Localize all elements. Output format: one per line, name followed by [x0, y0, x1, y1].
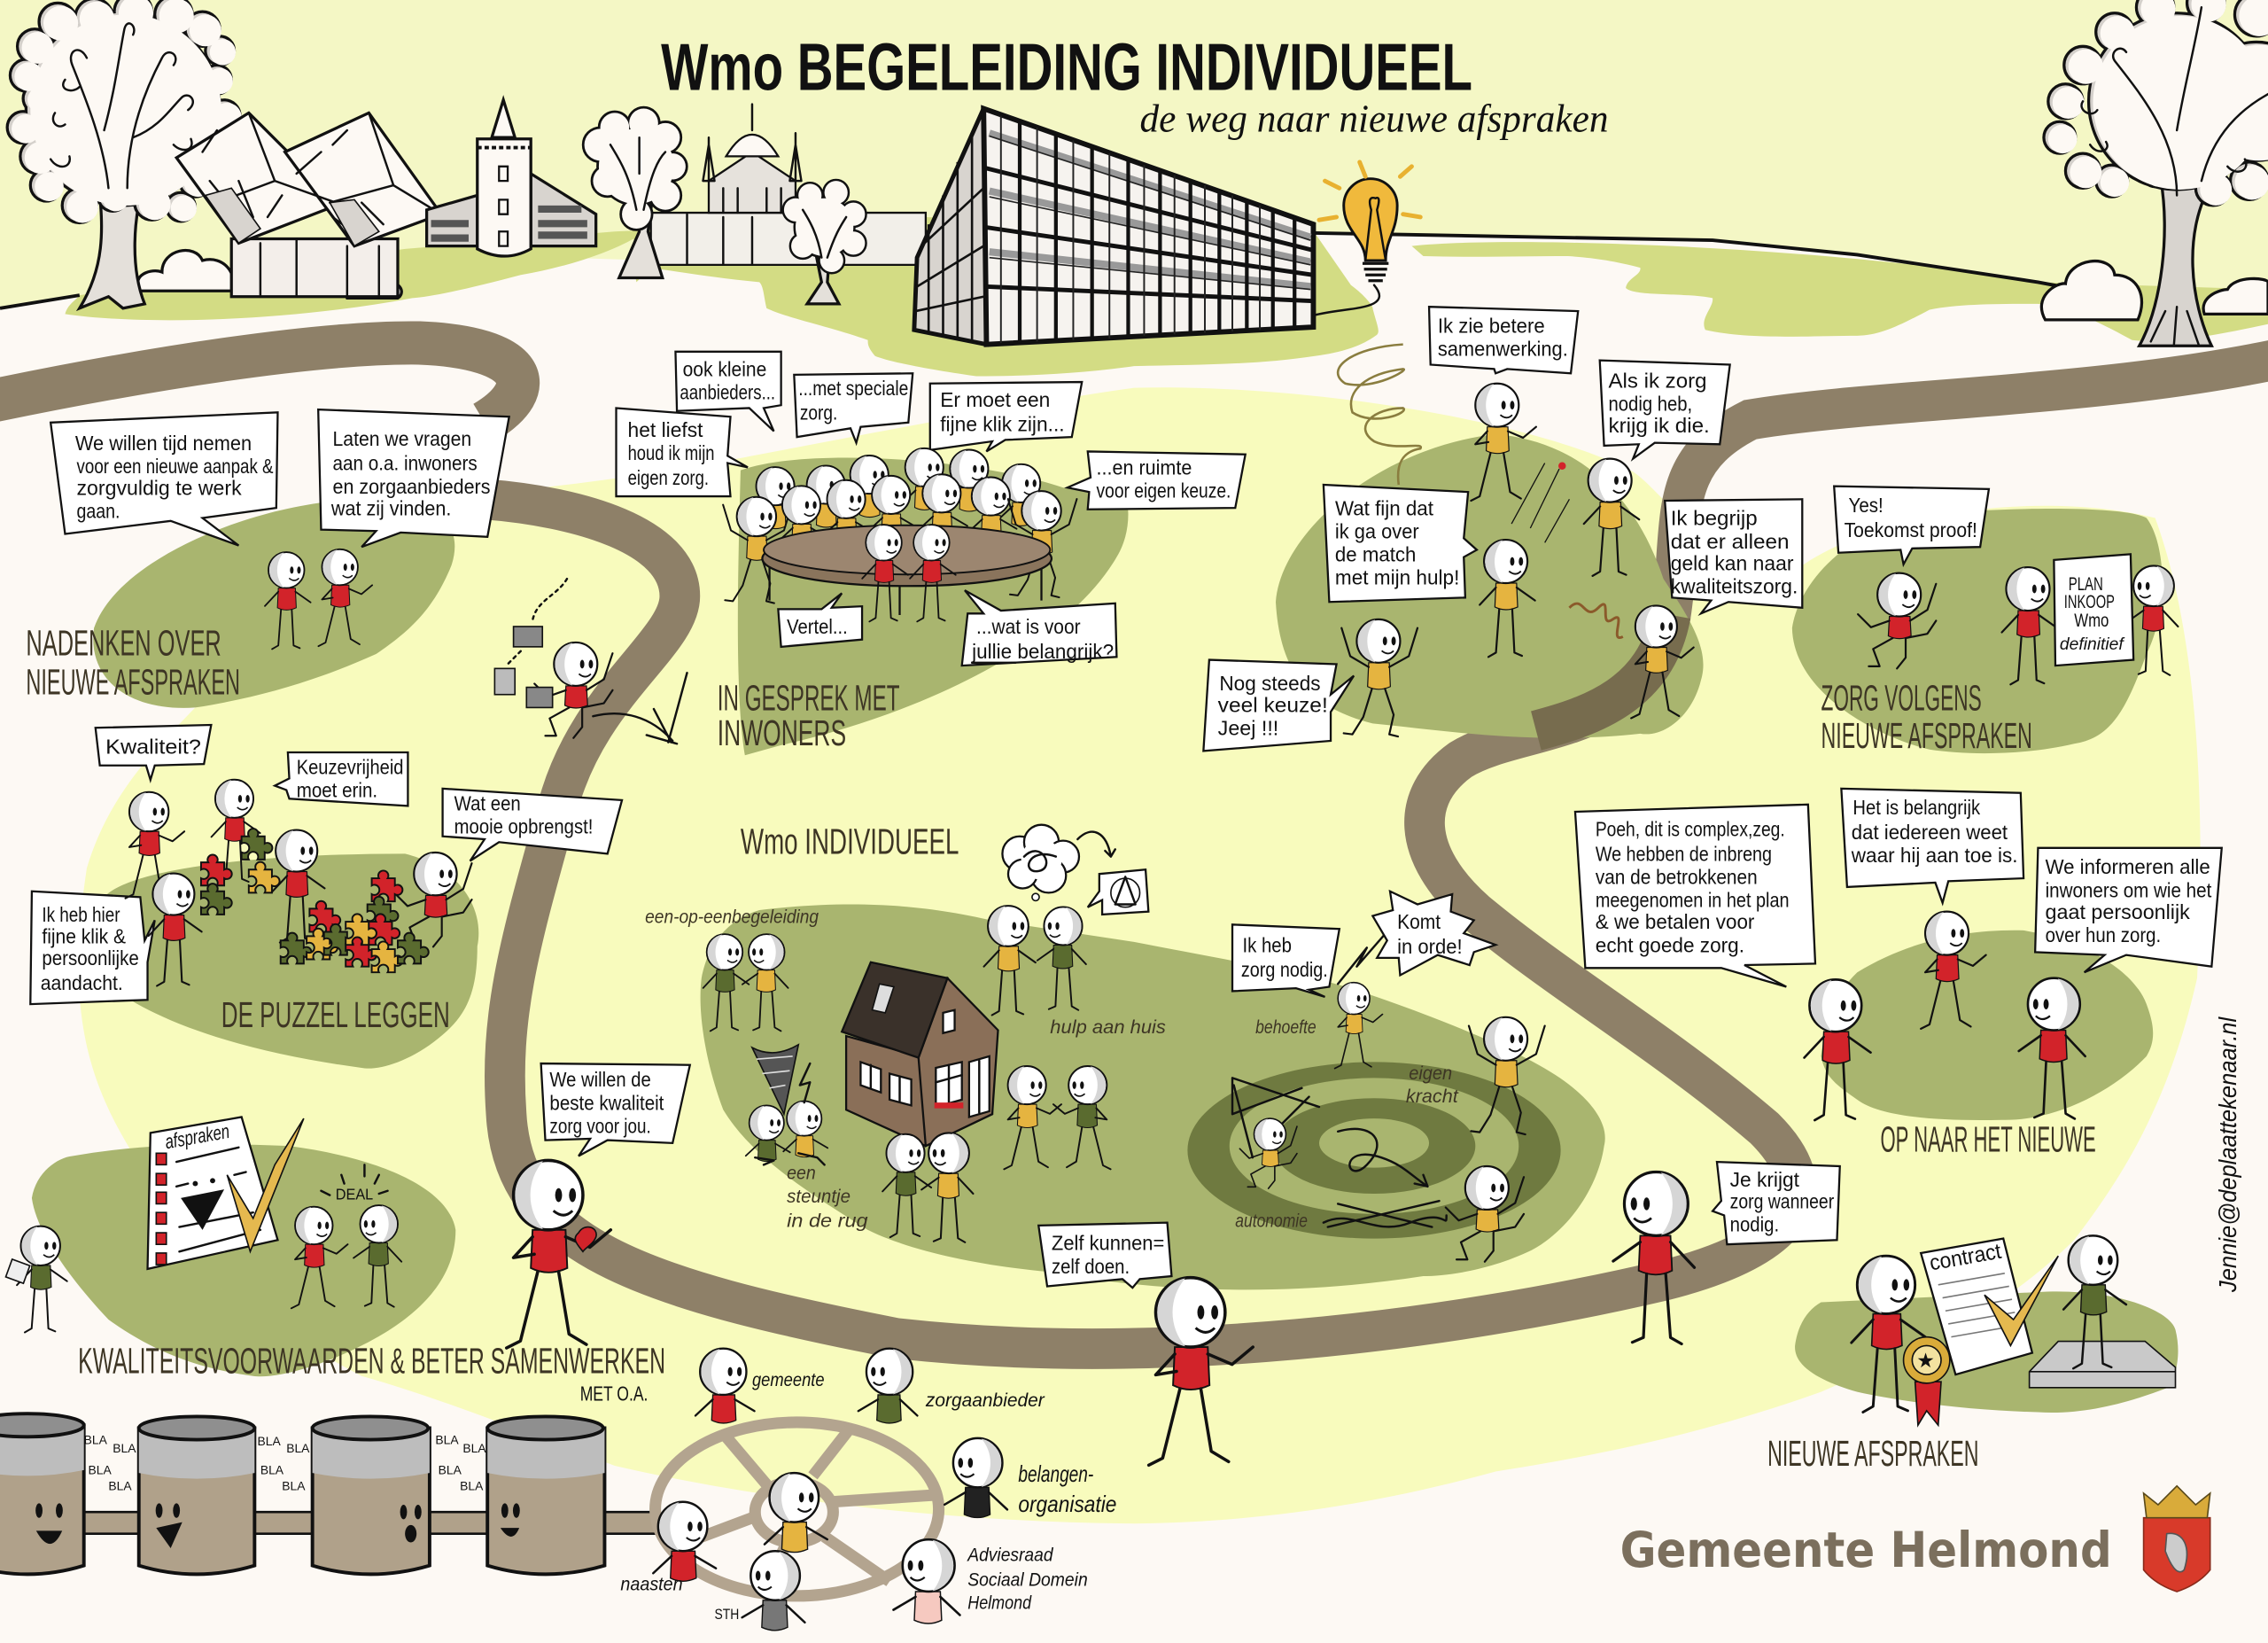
labels: steuntje — [787, 1187, 850, 1207]
bubbles: Nog steeds — [1219, 672, 1321, 695]
title — [661, 29, 1609, 141]
heading: IN GESPREK MET — [718, 678, 900, 719]
horizon line — [0, 233, 2062, 308]
figures — [653, 1349, 1007, 1631]
figures — [126, 780, 472, 985]
bubbles: mooie opbrengst! — [454, 814, 593, 837]
bubbles: de match — [1335, 543, 1416, 566]
tree left — [9, 0, 242, 308]
bubbles: Als ik zorg — [1609, 370, 1707, 393]
figures: DEAL — [336, 1186, 373, 1203]
speech bubble: Zelf kunnen= — [1052, 1232, 1164, 1255]
bubbles: Kwaliteit? — [105, 736, 201, 759]
speech bubble: Poeh, dit is complex,zeg. — [1596, 818, 1785, 841]
bubbles: fijne klik & — [42, 925, 126, 948]
bubbles: aanbieders... — [680, 381, 775, 404]
labels: gemeente — [752, 1370, 825, 1390]
credit: Jennie@deplaattekenaar.nl — [2214, 1016, 2241, 1293]
speech star: Komt — [1397, 910, 1441, 933]
speech bubble: We hebben de inbreng — [1596, 842, 1772, 865]
bubbles: zorg. — [800, 401, 837, 424]
speech bubble — [1232, 924, 1340, 997]
speech bubble: gaat persoonlijk — [2046, 900, 2190, 923]
bubbles: Ik begrijp — [1671, 507, 1758, 530]
panel: green blobs — [32, 434, 2178, 1413]
labels: organisatie — [1018, 1491, 1116, 1517]
bla labels: BLA — [439, 1463, 462, 1477]
bubbles: ik ga over — [1335, 519, 1419, 542]
icon: light bulb — [1313, 162, 1420, 315]
bubbles: Wat fijn dat — [1335, 496, 1434, 519]
speech bubble: meegenomen in het plan — [1596, 889, 1790, 912]
bla labels: BLA — [462, 1441, 486, 1455]
bubbles: kwaliteitszorg. — [1671, 574, 1798, 597]
bubbles: Er moet een — [940, 388, 1050, 411]
figures with plan board — [1858, 554, 2178, 684]
speech bubble: aan o.a. inwoners — [333, 452, 478, 475]
speech bubble: waar hij aan toe is. — [1851, 844, 2018, 867]
panel: de puzzel leggen — [30, 725, 622, 1035]
speech bubble: zelf doen. — [1052, 1255, 1130, 1278]
speech bubble: Yes! — [1849, 494, 1884, 517]
speech star: in orde! — [1397, 935, 1463, 958]
figure on pedestal — [2063, 1235, 2126, 1368]
figure with heart — [507, 1160, 610, 1348]
panel: zorg volgens nieuwe afspraken — [1821, 487, 2178, 756]
bla labels: BLA — [282, 1479, 306, 1493]
speech bubble — [1038, 1223, 1171, 1288]
heading: ZORG VOLGENS — [1821, 678, 1982, 719]
figures with plan board: PLAN — [2069, 574, 2103, 595]
speech bubble: beste kwaliteit — [549, 1091, 664, 1114]
document afspraken with check: afspraken — [163, 1119, 231, 1153]
tree right — [2046, 0, 2268, 346]
speech bubble: & we betalen voor — [1596, 910, 1755, 933]
pedestal — [2030, 1342, 2176, 1388]
pale yellow central field — [79, 387, 2201, 1523]
barrel — [0, 1413, 84, 1574]
bla labels: BLA — [460, 1479, 484, 1493]
bubbles: veel keuze! — [1218, 693, 1328, 716]
bla labels: BLA — [84, 1432, 108, 1446]
speech bubble — [1841, 789, 2023, 903]
speech bubble: van de betrokkenen — [1596, 866, 1758, 889]
road section through green field — [1536, 615, 1671, 731]
speech bubble: inwoners om wie het — [2046, 878, 2212, 901]
connector pipes — [84, 1512, 658, 1534]
labels: een — [787, 1164, 816, 1184]
labels: Adviesraad — [966, 1546, 1054, 1566]
speech bubble: Je krijgt — [1730, 1168, 1800, 1191]
barrel — [313, 1416, 430, 1574]
cube houses — [176, 113, 441, 297]
document afspraken with check — [148, 1117, 304, 1269]
heading: NIEUWE AFSPRAKEN — [1767, 1433, 1978, 1474]
bubbles: met mijn hulp! — [1335, 566, 1459, 589]
speech bubble: dat iedereen weet — [1852, 821, 2008, 844]
speech bubble: Laten we vragen — [333, 427, 471, 450]
figures with plan board: Wmo — [2074, 611, 2109, 631]
barrel — [487, 1416, 604, 1574]
panel: wmo individueel — [645, 821, 1545, 1262]
icons: springs and sparkles — [1338, 345, 1623, 638]
speech bubble — [541, 1063, 690, 1156]
sky — [0, 0, 2268, 311]
labels: eigen — [1409, 1063, 1452, 1084]
bubbles: Jeej !!! — [1218, 716, 1278, 739]
figure — [1852, 1256, 1925, 1413]
figures — [1805, 912, 2085, 1120]
speech bubble — [50, 412, 277, 546]
heading: OP NAAR HET NIEUWE — [1880, 1119, 2096, 1160]
bla labels — [84, 1432, 486, 1493]
figures — [1341, 384, 1694, 736]
heading — [718, 678, 900, 753]
labels: autonomie — [1235, 1211, 1308, 1232]
bubbles: houd ik mijn — [628, 441, 715, 464]
wheel — [656, 1422, 940, 1596]
speech bubble: voor een nieuwe aanpak & — [77, 455, 274, 478]
speech bubble: Het is belangrijk — [1852, 796, 1981, 819]
icon: medal — [1904, 1337, 1950, 1425]
labels: een-op-eenbegeleiding — [645, 907, 819, 928]
bubbles: ook kleine — [683, 358, 766, 381]
title: de weg naar nieuwe afspraken — [1140, 97, 1609, 141]
speech bubble — [1834, 487, 1989, 565]
bubbles: krijg ik die. — [1609, 414, 1710, 437]
heading: Wmo INDIVIDUEEL — [741, 821, 959, 861]
bubbles: Ik zie betere — [1438, 315, 1545, 338]
barrel — [139, 1416, 254, 1574]
bubbles: jullie belangrijk? — [971, 640, 1114, 663]
heading — [78, 1340, 665, 1405]
panel: kwaliteitsvoorwaarden — [5, 1063, 690, 1405]
icon: coat of arms — [2144, 1486, 2210, 1592]
bubbles: aandacht. — [41, 971, 123, 994]
speech bubble: en zorgaanbieders — [333, 475, 490, 498]
bla labels: BLA — [113, 1441, 136, 1455]
panel: nadenken over nieuwe afspraken — [26, 409, 509, 703]
panel: nieuwe afspraken — [1767, 1235, 2176, 1474]
figure: runner with papers — [494, 579, 687, 744]
labels: in de rug — [787, 1211, 868, 1232]
church and wall — [651, 105, 926, 265]
figures — [5, 1164, 401, 1332]
speech bubble: Toekomst proof! — [1845, 518, 1977, 541]
bubbles: nodig heb, — [1609, 393, 1692, 416]
bubbles: ...en ruimte — [1097, 456, 1192, 479]
table with residents — [723, 448, 1076, 621]
labels: naasten — [620, 1574, 683, 1594]
speech bubble: wat zij vinden. — [330, 496, 451, 519]
contract with check — [1921, 1239, 2058, 1374]
bubbles: eigen zorg. — [628, 466, 709, 489]
panel: samenwerking wheel — [620, 1349, 1116, 1631]
heading: NIEUWE AFSPRAKEN — [1821, 715, 2032, 756]
small trees — [585, 109, 865, 304]
labels: Sociaal Domein — [967, 1569, 1088, 1590]
bubbles: ...met speciale — [798, 377, 908, 400]
bubbles: dat er alleen — [1671, 530, 1790, 553]
bubbles: samenwerking. — [1438, 338, 1568, 361]
speech star — [1338, 892, 1495, 984]
speech bubble — [318, 409, 509, 547]
figures — [703, 906, 1545, 1262]
bla labels: BLA — [286, 1441, 310, 1455]
speech bubble — [2035, 848, 2222, 972]
bla labels: BLA — [260, 1463, 284, 1477]
speech bubble: zorg wanneer — [1730, 1189, 1835, 1212]
panel: road — [0, 343, 2268, 1349]
contract with check: contract — [1928, 1240, 2003, 1275]
speech bubble: nodig. — [1730, 1212, 1779, 1235]
panel: op naar het nieuwe — [1575, 789, 2222, 1160]
title: Wmo BEGELEIDING INDIVIDUEEL — [661, 29, 1472, 104]
panel: inwoners tevreden — [1203, 307, 1802, 751]
bubbles: persoonlijke — [42, 946, 139, 969]
icon: tornado — [752, 1045, 810, 1114]
speech bubble: zorgvuldig te werk — [77, 476, 242, 499]
building — [914, 109, 1313, 345]
icon: medal: ★ — [1916, 1349, 1935, 1372]
bubbles — [617, 352, 1246, 666]
figure: zelf doen — [1149, 1278, 1253, 1465]
puzzle pieces — [201, 829, 429, 972]
speech bubble: zorg nodig. — [1241, 958, 1328, 981]
bubbles: fijne klik zijn... — [940, 413, 1065, 436]
speech bubble — [1575, 805, 1815, 987]
heading: KWALITEITSVOORWAARDEN & BETER SAMENWERKEN — [78, 1340, 665, 1381]
bla labels: BLA — [435, 1432, 459, 1446]
panel: in gesprek met inwoners — [617, 352, 1246, 753]
bubbles: het liefst — [628, 418, 703, 441]
panel: barrels — [0, 1413, 658, 1574]
heading: DE PUZZEL LEGGEN — [221, 994, 450, 1035]
labels — [645, 907, 1459, 1232]
bubbles: voor eigen keuze. — [1097, 479, 1231, 502]
heading — [1821, 678, 2032, 756]
heading: NADENKEN OVER — [26, 623, 221, 664]
castle — [427, 100, 596, 256]
labels: belangen- — [1018, 1460, 1093, 1487]
bubbles: moet erin. — [297, 779, 377, 802]
speech bubble: We willen de — [549, 1068, 651, 1091]
bla labels: BLA — [89, 1463, 113, 1477]
bubbles: Vertel... — [787, 615, 848, 638]
bubbles: geld kan naar — [1671, 551, 1794, 574]
icon: thought cloud with triangle — [1002, 825, 1148, 915]
figures with plan board: INKOOP — [2064, 592, 2115, 612]
light green grass under town — [65, 217, 1379, 377]
spiral target — [1187, 1062, 1561, 1239]
speech bubble: gaan. — [77, 500, 120, 523]
figure: je krijgt zorg — [1613, 1172, 1694, 1343]
labels: STH — [715, 1607, 739, 1623]
heading: INWONERS — [718, 712, 846, 753]
speech bubble: We informeren alle — [2046, 855, 2210, 878]
bla labels: BLA — [108, 1479, 132, 1493]
house — [842, 962, 998, 1146]
bubbles: Ik heb hier — [42, 903, 120, 926]
figures with plan board: definitief — [2060, 635, 2125, 654]
bushes — [137, 251, 2268, 320]
heading: MET O.A. — [580, 1382, 648, 1405]
bubbles — [30, 725, 622, 1004]
heading — [26, 623, 240, 703]
speech bubble: Ik heb — [1242, 933, 1292, 956]
bla labels: BLA — [258, 1434, 282, 1448]
bubbles: Wat een — [454, 791, 521, 814]
heading: NIEUWE AFSPRAKEN — [26, 662, 240, 703]
speech bubble: echt goede zorg. — [1596, 933, 1744, 956]
bubbles: Keuzevrijheid — [297, 756, 404, 779]
labels — [620, 1370, 1116, 1623]
labels: Helmond — [967, 1593, 1032, 1614]
labels: hulp aan huis — [1050, 1017, 1166, 1038]
labels: behoefte — [1255, 1017, 1317, 1038]
speech bubble: zorg voor jou. — [549, 1114, 651, 1137]
logo text: Gemeente Helmond — [1620, 1522, 2112, 1579]
labels: zorgaanbieder — [925, 1390, 1045, 1411]
labels: kracht — [1406, 1086, 1459, 1107]
speech bubble: over hun zorg. — [2046, 923, 2161, 946]
bubbles — [1203, 307, 1802, 751]
bubbles: ...wat is voor — [976, 615, 1081, 638]
figures — [265, 549, 372, 649]
speech bubble — [1713, 1162, 1840, 1244]
speech bubble: We willen tijd nemen — [75, 432, 252, 455]
